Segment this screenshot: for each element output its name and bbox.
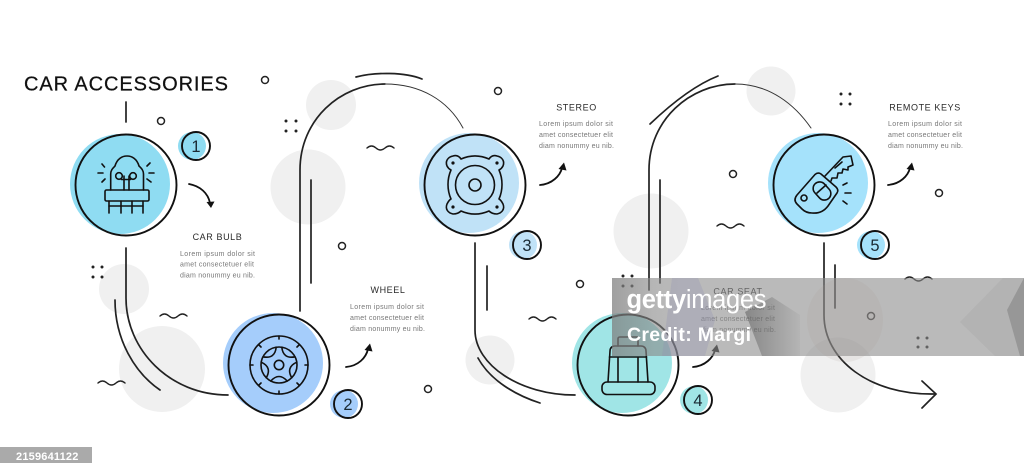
number badge 1 — [178, 132, 210, 160]
body text: remote keys: Lorem ipsum dolor sit — [888, 121, 962, 128]
connector path: step 2 to step 3 — [300, 73, 463, 311]
heading: wheel: WHEEL — [370, 285, 406, 295]
dot grid accents — [92, 92, 928, 348]
icon disc: car seat — [572, 313, 672, 413]
step 5: remote keys — [768, 102, 963, 259]
stock id tag — [0, 447, 92, 463]
icon disc: remote keys — [768, 133, 868, 233]
ring — [76, 134, 176, 236]
ring — [578, 314, 678, 416]
arrow 2 — [346, 344, 372, 367]
arrow 3 — [540, 162, 566, 185]
ring — [424, 134, 526, 236]
body text: wheel: amet consectetuer elit — [350, 315, 424, 322]
icon: car seat — [602, 337, 655, 394]
icon disc: car bulb — [70, 134, 170, 234]
icon: car bulb — [98, 156, 154, 213]
ring — [228, 314, 330, 416]
watermark band — [612, 278, 1024, 362]
icon: stereo speaker — [446, 156, 504, 214]
number badge 2: 2 — [343, 396, 353, 414]
stock id tag: 2159641122 — [16, 451, 79, 463]
connector path: step 1 to step 2 — [115, 102, 228, 395]
body text: stereo: diam nonummy eu nib. — [539, 143, 614, 150]
step 1: car bulb — [70, 132, 255, 280]
body text: wheel: Lorem ipsum dolor sit — [350, 304, 424, 311]
number badge 4: 4 — [693, 392, 703, 410]
body text: stereo: amet consectetuer elit — [539, 132, 613, 139]
heading: car seat: CAR SEAT — [713, 286, 763, 296]
number badge 2 — [330, 390, 362, 418]
connector path: step 3 to step 4 — [475, 243, 575, 403]
connector path: step 5 to end arrow — [824, 243, 936, 408]
body text: car seat: Lorem ipsum dolor sit — [701, 305, 775, 312]
arrow 1 — [189, 184, 214, 208]
grey background circles — [99, 66, 876, 412]
step 4: car seat — [572, 286, 776, 416]
watermark credit text: Credit: Margi — [627, 324, 751, 346]
icon: remote key — [795, 156, 853, 213]
body text: car bulb: amet consectetuer elit — [180, 262, 254, 268]
number badge 3: 3 — [522, 237, 532, 255]
connector path: step 4 to step 5 — [649, 76, 811, 290]
icon disc: wheel — [223, 313, 323, 413]
small ring accents — [158, 76, 942, 392]
heading: remote keys: REMOTE KEYS — [889, 102, 961, 112]
arrow 4 — [693, 344, 720, 367]
title: CAR ACCESSORIES — [24, 74, 228, 96]
number badge 5 — [857, 231, 889, 259]
body text: remote keys: diam nonummy eu nib. — [888, 143, 963, 150]
number badge 3 — [509, 231, 541, 259]
squiggle accents — [98, 146, 932, 385]
icon: wheel — [250, 336, 308, 394]
heading: car bulb: CAR BULB — [193, 232, 242, 242]
body text: wheel: diam nonummy eu nib. — [350, 326, 425, 333]
step 3: stereo — [419, 102, 614, 259]
number badge 1: 1 — [191, 138, 201, 156]
step 2: wheel — [223, 285, 425, 418]
ring — [774, 134, 874, 236]
body text: car bulb: Lorem ipsum dolor sit — [180, 251, 255, 258]
body text: car seat: amet consectetuer elit — [701, 316, 775, 323]
heading: stereo: STEREO — [556, 102, 597, 112]
icon disc: stereo — [419, 133, 519, 233]
body text: car bulb: diam nonummy eu nib. — [180, 272, 255, 280]
arrow 5 — [888, 162, 914, 185]
number badge 5: 5 — [870, 237, 880, 255]
body text: car seat: diam nonummy eu nib. — [701, 327, 776, 334]
watermark logo text: gettyimages — [626, 286, 766, 314]
body text: stereo: Lorem ipsum dolor sit — [539, 121, 613, 128]
number badge 4 — [680, 386, 712, 414]
body text: remote keys: amet consectetuer elit — [888, 132, 962, 139]
